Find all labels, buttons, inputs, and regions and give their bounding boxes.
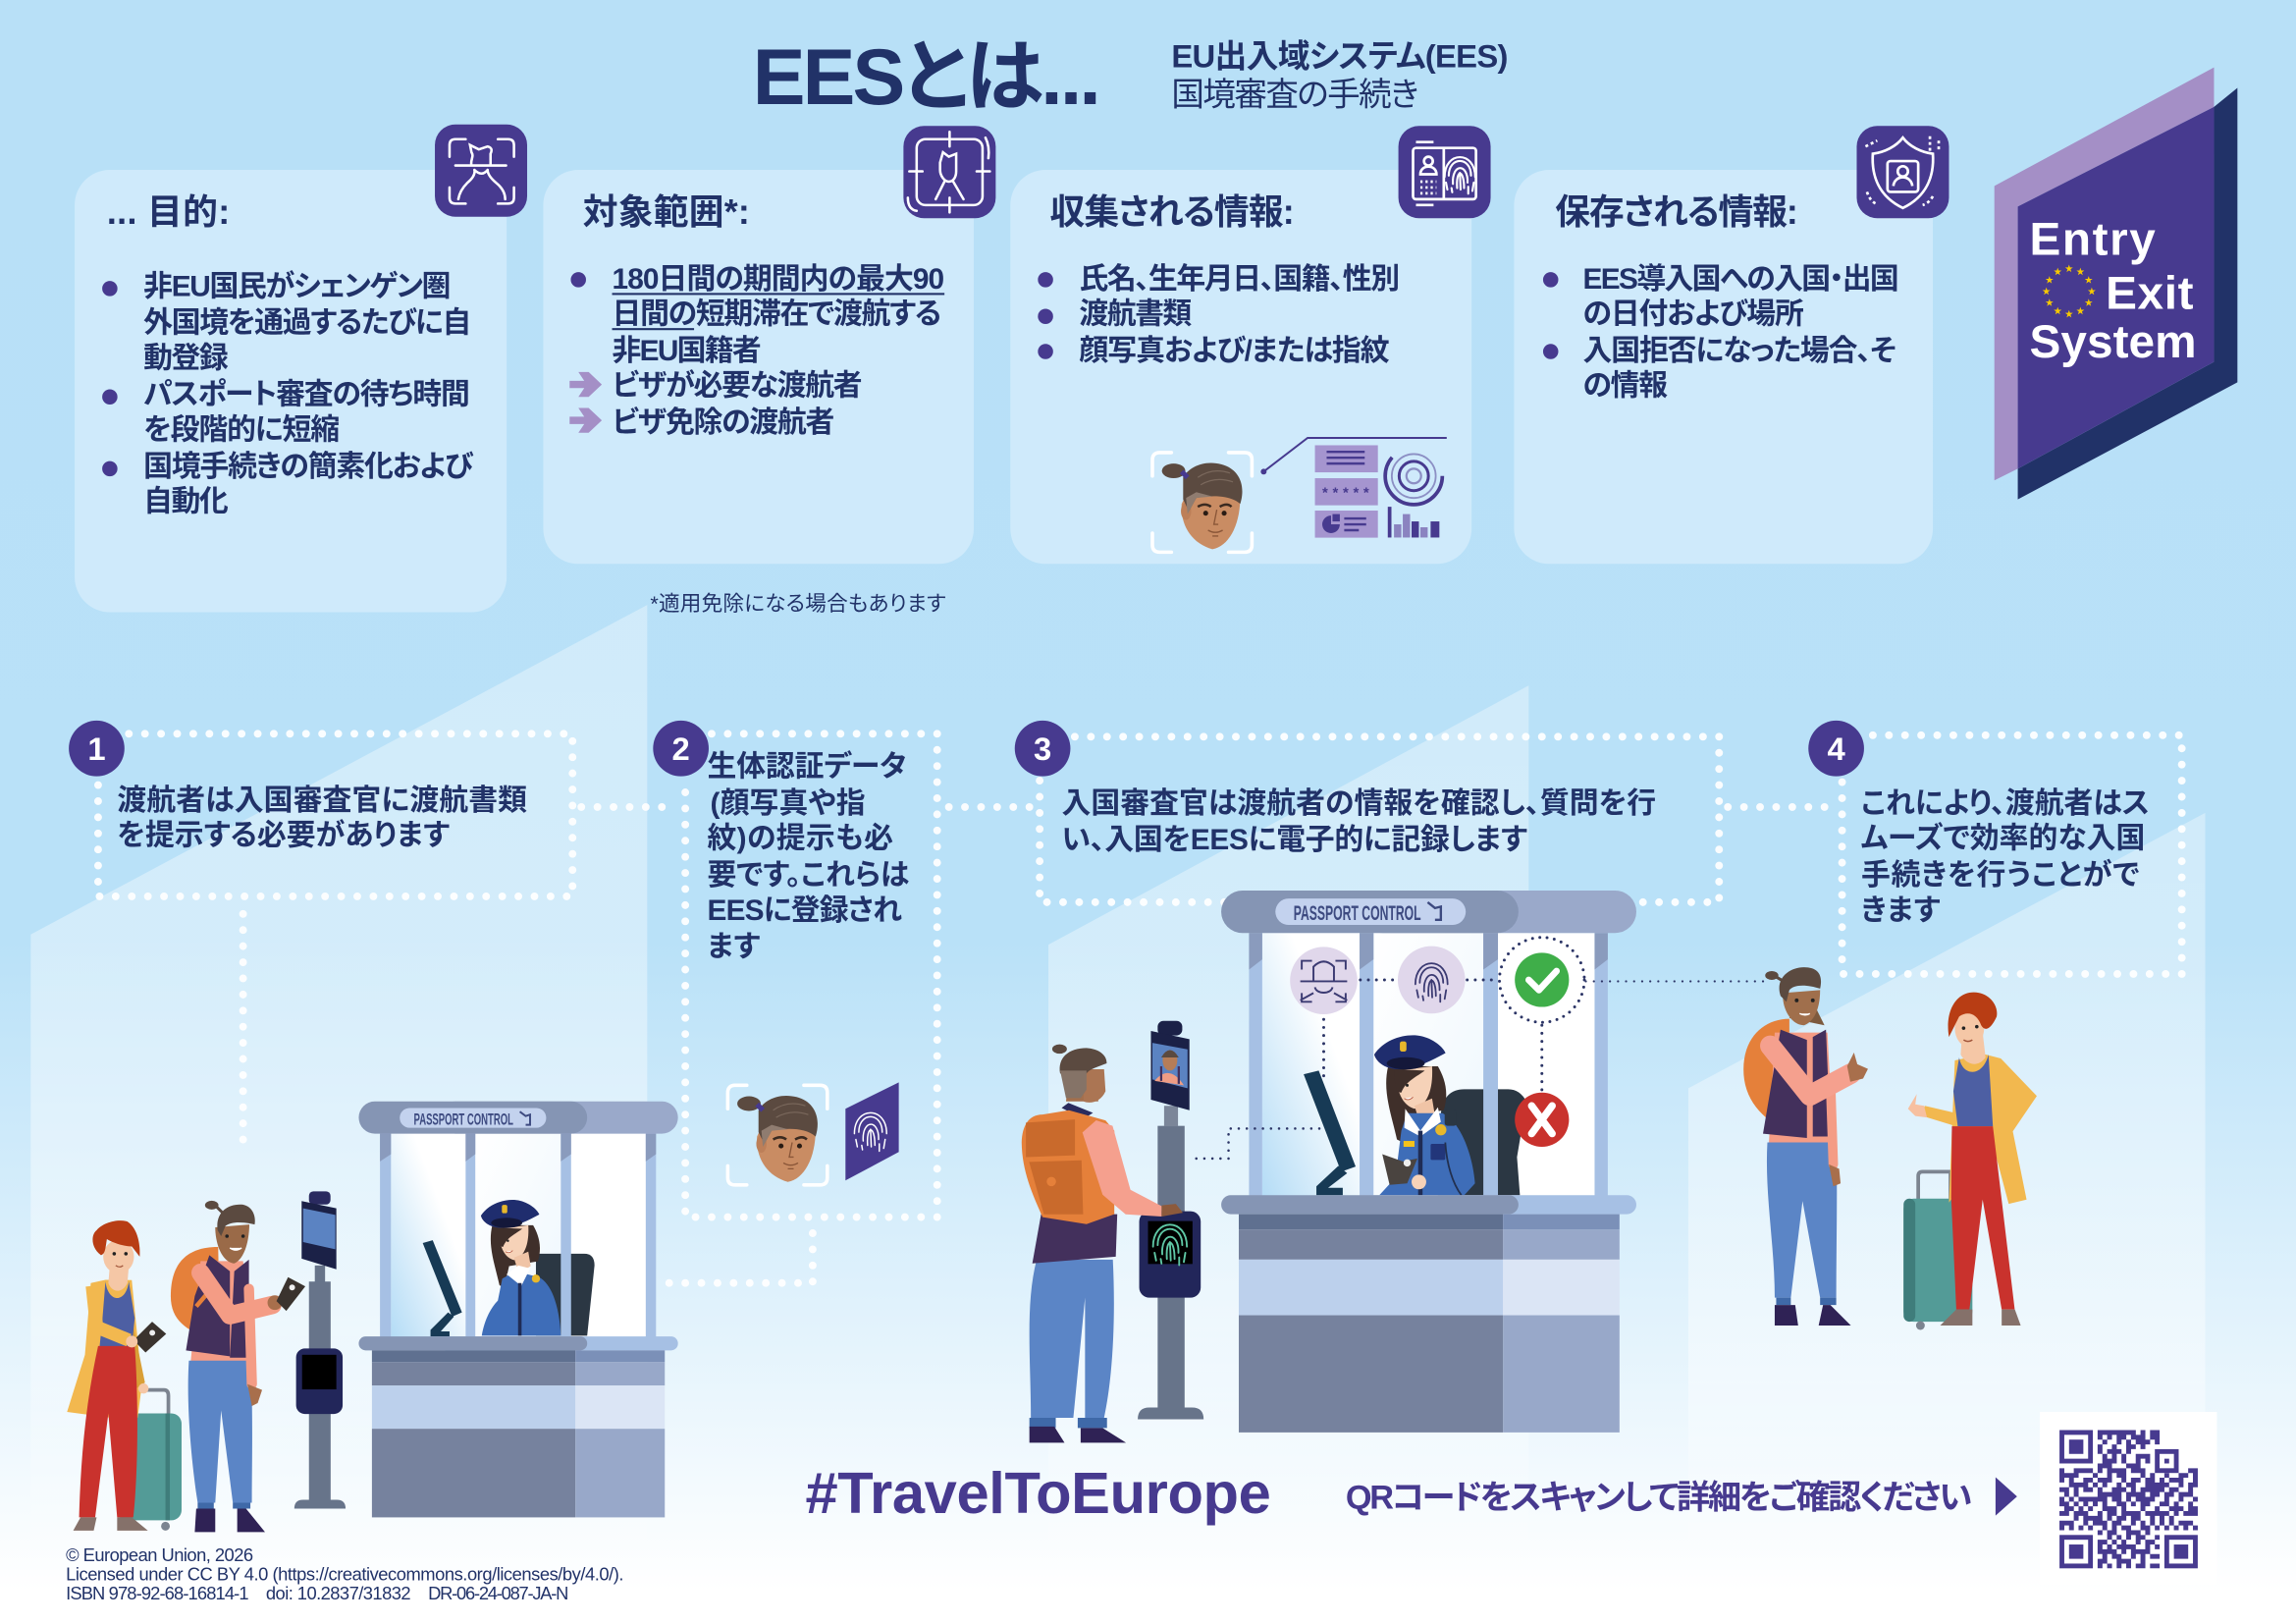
- kiosk: step 3: [1138, 1021, 1203, 1419]
- list: scope: ビザが必要な渡航者: [613, 369, 863, 403]
- bullet list: collected data: [1038, 263, 1400, 367]
- subtitle: 国境審査の手続き: [1171, 76, 1418, 113]
- person: man gesturing, step 4: [1743, 967, 1867, 1326]
- sign: passport control: [400, 1108, 546, 1129]
- bullet list: stored data: 入国拒否になった場合、そ: [1583, 335, 1896, 367]
- bullet list: stored data: EES導入国への入国・出国: [1583, 263, 1899, 296]
- step 1: 1: [87, 731, 106, 767]
- step 2: (顔写真や指: [710, 787, 866, 820]
- step 1: を提示する必要があります: [117, 819, 450, 852]
- heading: collected data: 収集される情報:: [1050, 192, 1295, 232]
- step 4: 4: [1827, 731, 1845, 767]
- person: woman with suitcase, step 1: [67, 1220, 182, 1531]
- bullet list: stored data: の情報: [1583, 370, 1668, 403]
- dotted flow lines: [98, 733, 2182, 1283]
- step 2: 生体認証データ: [707, 750, 906, 784]
- bullet list: purpose: 非EU国民がシェンゲン圏: [143, 269, 451, 302]
- step 3: 3: [1034, 731, 1051, 767]
- cardigan: [1949, 1055, 2037, 1204]
- top: [1953, 1055, 1993, 1126]
- pants: [1951, 1126, 2014, 1310]
- list: scope: 180日間の期間内の最大90: [613, 263, 944, 296]
- step 4: きます: [1861, 894, 1941, 927]
- arrow: visa exempt: [569, 407, 602, 433]
- officer: [481, 1200, 561, 1335]
- bullet list: purpose: 動登録: [143, 342, 229, 374]
- illustration: face scan: [1152, 453, 1252, 552]
- bullet list: purpose: 外国境を通過するたびに自: [143, 307, 471, 340]
- kiosk: step 1: [294, 1191, 346, 1508]
- step 4: 手続きを行うことがで: [1861, 858, 2139, 892]
- list: scope: 非EU国籍者: [613, 335, 762, 367]
- person: woman with suitcase, step 4: [1903, 993, 2037, 1329]
- monitor: [423, 1240, 462, 1336]
- copyright footer: © European Union, 2026: [66, 1544, 253, 1565]
- screen: traveller: [1154, 1051, 1184, 1085]
- step 3: [1015, 721, 1656, 856]
- roof: [440, 1102, 678, 1134]
- posts: [1249, 933, 1608, 1197]
- bullet list: purpose: 国境手続きの簡素化および: [143, 451, 474, 483]
- list: scope: ビザ免除の渡航者: [613, 406, 834, 439]
- step 4: ムーズで効率的な入国: [1860, 822, 2145, 855]
- panel: stored data: [1514, 170, 1933, 564]
- arrow: visa required: [569, 372, 602, 397]
- copyright footer: ISBN 978-92-68-16814-1: [66, 1583, 249, 1603]
- pants: [80, 1346, 137, 1517]
- step 4: [1808, 721, 2150, 927]
- sign: passport control: [1275, 898, 1466, 925]
- bullet list: purpose: [102, 269, 474, 518]
- copyright footer: DR-06-24-087-JA-N: [428, 1583, 568, 1603]
- head: [108, 1266, 129, 1291]
- posts: [380, 1134, 656, 1337]
- step 2: EESに登録され: [707, 894, 902, 927]
- illustration: data graphics: [1260, 438, 1447, 538]
- heading: purpose: ... 目的:: [107, 192, 230, 232]
- background shape: centre: [1048, 685, 1528, 1603]
- officer: [1374, 1035, 1475, 1195]
- step 3: い、入国をEESに電子的に記録します: [1061, 824, 1527, 856]
- step 2: 要です。これらは: [707, 859, 909, 892]
- heading: stored data: 保存される情報:: [1555, 192, 1798, 232]
- background shape: left: [30, 605, 647, 1603]
- subtitle: [1171, 38, 1508, 113]
- step 2: [653, 721, 909, 963]
- title: EESとは...: [753, 33, 1101, 122]
- cardigan: [67, 1279, 142, 1418]
- icon: EU stars: [2043, 265, 2096, 317]
- top: [99, 1281, 134, 1347]
- step 2: ます: [707, 931, 760, 963]
- person: man at kiosk, step 3: [1022, 1045, 1183, 1442]
- icon: face scan: [435, 125, 527, 217]
- icon: passport with fingerprint: [1399, 126, 1491, 218]
- icon: shield: [1856, 126, 1949, 218]
- sign: passport control: PASSPORT CONTROL: [1294, 902, 1421, 925]
- head: [1960, 1033, 1986, 1064]
- bullet list: stored data: [1543, 263, 1899, 403]
- bullet list: collected data: 顔写真および/または指紋: [1079, 335, 1390, 367]
- subtitle: EU出入域システム(EES): [1171, 38, 1508, 75]
- panel: purpose: [75, 170, 507, 613]
- QR code: [2040, 1412, 2216, 1585]
- suitcase: [140, 1390, 169, 1415]
- hashtag: #TravelToEurope: [805, 1460, 1271, 1526]
- list: scope: 日間の短期滞在で渡航する: [613, 298, 941, 331]
- logo: Entry Exit System: [1995, 68, 2237, 500]
- counter: [440, 1336, 678, 1350]
- arm and passport: [133, 1322, 166, 1352]
- bullet list: purpose: を段階的に短縮: [143, 414, 340, 447]
- illustration: data graphics: *****: [1322, 485, 1369, 501]
- step 1: 渡航者は入国審査官に渡航書類: [117, 785, 527, 817]
- background shape: right: [1688, 813, 2206, 1603]
- step 1: [69, 721, 527, 852]
- bullet list: collected data: 渡航書類: [1079, 298, 1192, 331]
- step 4: これにより、渡航者はス: [1861, 787, 2150, 820]
- panel: collected data: [1010, 170, 1471, 564]
- counter: [1362, 1195, 1636, 1215]
- monitor: [1304, 1070, 1356, 1195]
- copyright footer: [66, 1544, 623, 1603]
- heading: scope: 対象範囲*:: [583, 192, 750, 232]
- footnote: *適用免除になる場合もあります: [650, 591, 946, 616]
- logo: Entry Exit System: System: [2030, 316, 2197, 368]
- copyright footer: Licensed under CC BY 4.0 (https://creativecommons.org/licenses/by/4.0/).: [66, 1564, 623, 1585]
- roof: [1362, 891, 1636, 933]
- step 2: 紋)の提示も必: [707, 823, 893, 855]
- dotted connectors: [1192, 980, 1542, 1159]
- bullet list: stored data: の日付および場所: [1583, 298, 1804, 331]
- logo: Entry Exit System: Exit: [2106, 268, 2194, 320]
- logo: Entry Exit System: Entry: [2030, 214, 2156, 266]
- QR call to action: QRコードをスキャンして詳細をご確認ください: [1346, 1479, 1972, 1516]
- step 2 illustration: face and fingerprint card: [727, 1082, 899, 1185]
- arrow: to QR code: [1996, 1478, 2017, 1516]
- icon: face target: [903, 126, 995, 218]
- chair: [536, 1254, 595, 1335]
- booth: step 1 passport control: [358, 1102, 678, 1517]
- panel: scope: [543, 170, 974, 564]
- list: scope: [569, 263, 944, 439]
- verification flow: face, fingerprint, approved, refused: [1290, 938, 1584, 1147]
- step 3: 入国審査官は渡航者の情報を確認し、質問を行: [1061, 787, 1656, 820]
- bullet list: collected data: 氏名、生年月日、国籍、性別: [1079, 263, 1400, 296]
- step 2: 2: [672, 731, 690, 767]
- chair: [1438, 1089, 1526, 1195]
- bullet list: purpose: パスポート審査の待ち時間: [143, 379, 470, 411]
- bullet list: purpose: 自動化: [143, 486, 229, 518]
- person: man with passport, step 1: [171, 1201, 305, 1532]
- booth: step 3 passport control: [1192, 891, 1765, 1433]
- copyright footer: doi: 10.2837/31832: [266, 1583, 411, 1603]
- sign: passport control: PASSPORT CONTROL: [414, 1111, 513, 1129]
